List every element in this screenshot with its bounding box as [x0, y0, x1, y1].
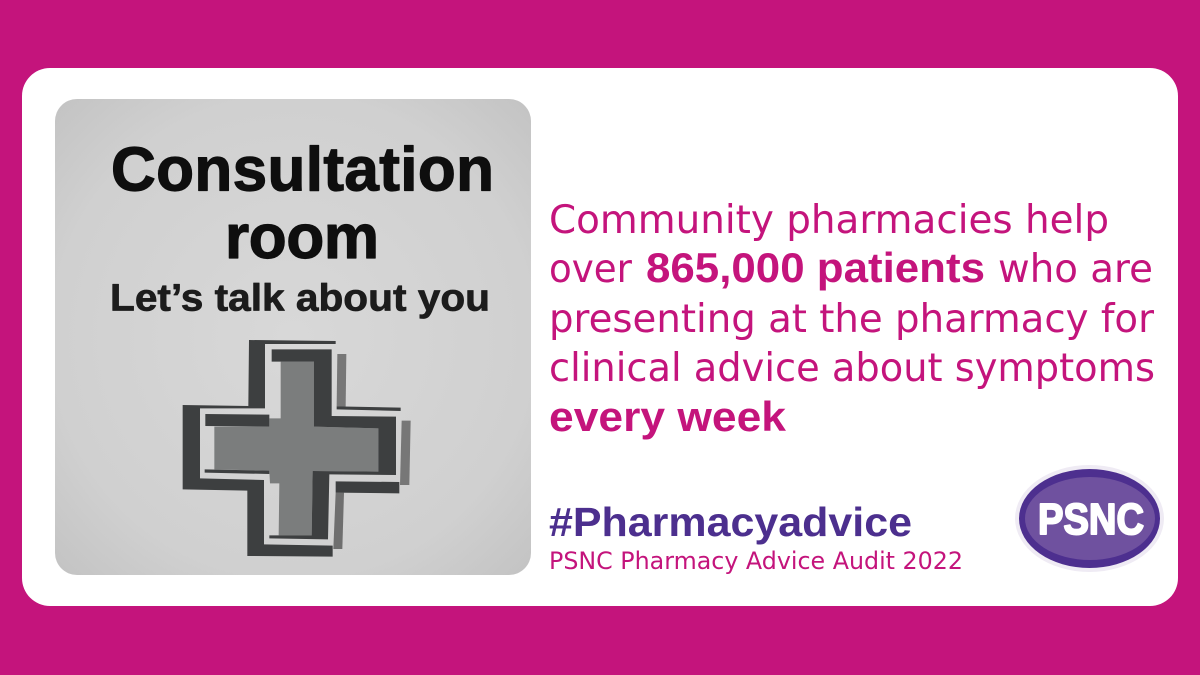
sign subheading: Let’s talk about you: [110, 278, 490, 320]
panel: consultation room sign photo: [55, 99, 531, 575]
logo: PSNC: PSNC: [1038, 495, 1144, 544]
text block: main message: 865,000 patients: [646, 244, 985, 291]
logo: PSNC: [1015, 465, 1164, 572]
source line: PSNC Pharmacy Advice Audit 2022: [549, 547, 963, 575]
text block: main message: clinical advice about symptoms: [549, 346, 1155, 391]
text block: main message: presenting at the pharmacy for: [549, 297, 1155, 342]
text block: main message: over: [549, 247, 633, 292]
text block: main message: every week: [549, 393, 787, 440]
sign heading: room: room: [225, 203, 379, 272]
text block: main message: Community pharmacies help: [549, 198, 1109, 243]
text block: main message: [549, 198, 1155, 440]
text block: main message: who are: [998, 247, 1153, 292]
hashtag: #Pharmacyadvice: [549, 499, 912, 545]
sign heading: Consultation: Consultation: [111, 136, 494, 204]
icon: medical cross: [183, 340, 411, 557]
panel: white card: [22, 68, 1178, 606]
